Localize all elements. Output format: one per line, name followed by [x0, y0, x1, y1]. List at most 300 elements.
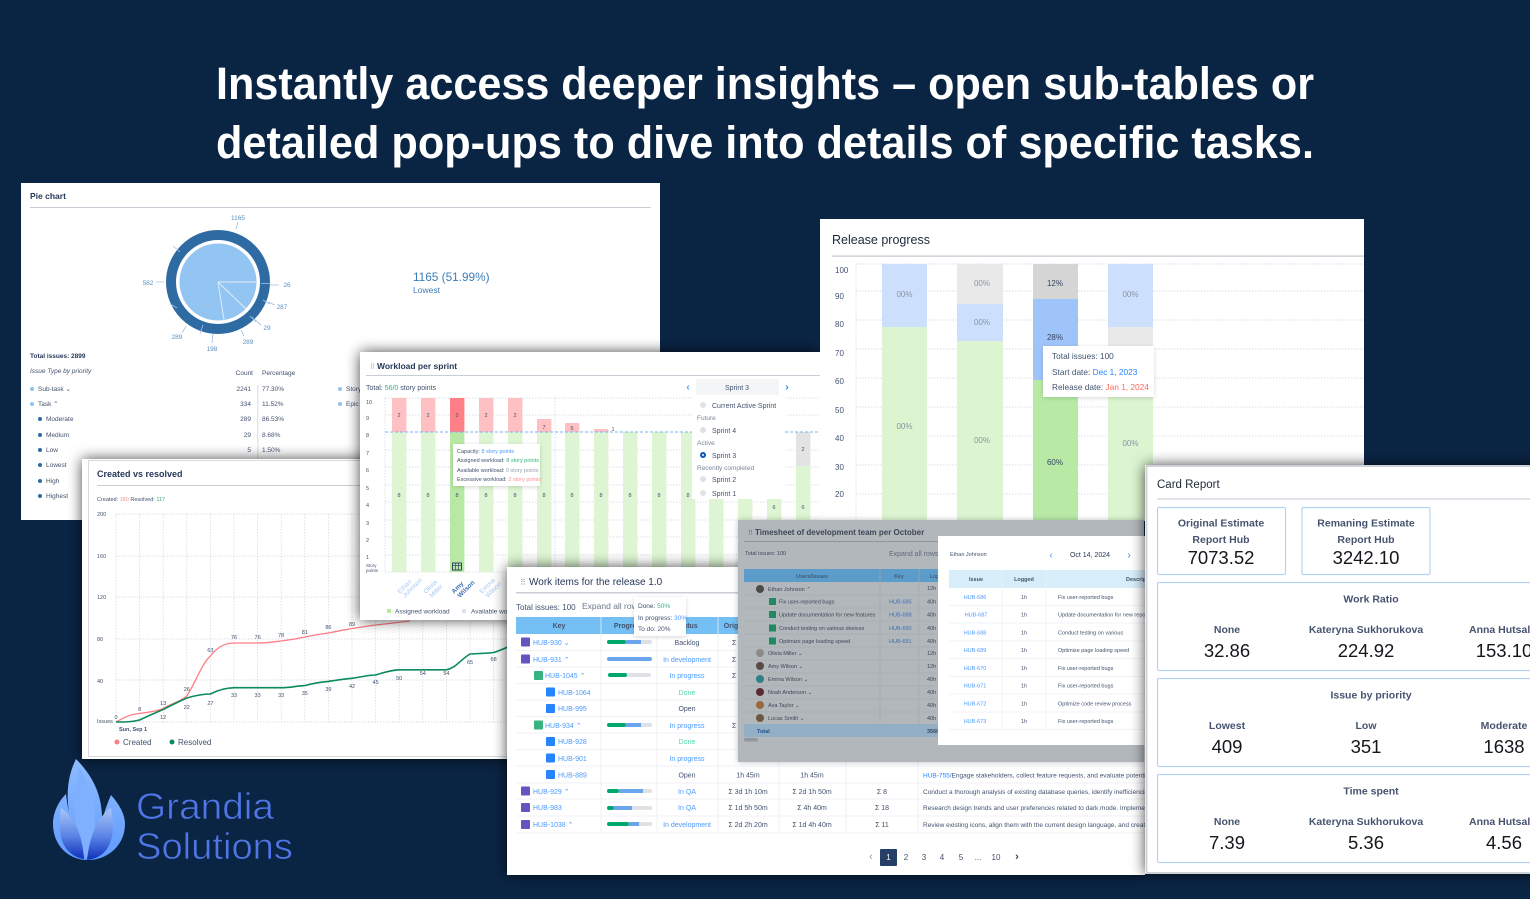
- data labels: 89: [349, 622, 355, 628]
- panel: release progress: Release progress: [832, 233, 930, 247]
- progress tooltip: To do: 20%: [638, 626, 671, 633]
- workload y axis: points: [366, 568, 379, 573]
- y axis labels: 160: [97, 554, 106, 560]
- workload y axis: 8: [366, 433, 369, 439]
- panel: created vs resolved: [82, 459, 522, 759]
- panel: work items: Work items for the release 1.0: [529, 577, 663, 588]
- pie chart table: 289: [240, 416, 251, 423]
- pie chart table: Task ⌃: [38, 400, 59, 408]
- panel: workload per sprint: Total: 56/0 story points: [366, 385, 437, 392]
- title: detailed pop-ups to dive into details of specific tasks.: [216, 117, 1314, 168]
- release y axis: 70: [835, 349, 844, 358]
- pie chart table: Highest: [46, 493, 68, 500]
- pagination: [869, 849, 1019, 866]
- workload y axis: 4: [366, 503, 369, 509]
- release bar 1: 00%: [896, 422, 913, 431]
- pagination: 2: [904, 853, 909, 862]
- release y axis: 40: [835, 434, 844, 443]
- workload grid: [385, 398, 820, 572]
- pie chart table: Story: [346, 386, 362, 393]
- release bar 4: 00%: [1122, 439, 1139, 448]
- card: work ratio: None: [1214, 624, 1240, 636]
- line chart legend: [114, 738, 211, 747]
- panel: card report: [1145, 465, 1530, 874]
- release tooltip: Release date: Jan 1, 2024: [1052, 382, 1149, 392]
- time columns: [728, 640, 889, 829]
- sprint selector: Current Active Sprint: [712, 403, 776, 410]
- timesheet users: 40h: [927, 677, 936, 683]
- data labels: 13: [160, 701, 166, 707]
- logo: Grandia Solutions: [53, 759, 293, 867]
- workload tooltip: Assigned workload: 8 story points: [457, 458, 539, 464]
- timesheet popup: Fix user-reported bugs: [1058, 666, 1114, 672]
- data labels: 63: [207, 648, 213, 654]
- timesheet popup: 1h: [1021, 666, 1027, 672]
- timesheet popup: Ethan Johnson: [950, 552, 987, 558]
- card: issue by priority: Issue by priority: [1330, 690, 1412, 702]
- work items table header: Key: [553, 623, 566, 630]
- description column: HUB-755/Engage stakeholders, collect feature requests, and evaluate potential: [923, 772, 1151, 780]
- sprint selector: Future: [697, 415, 716, 422]
- workload y axis: Story: [366, 563, 377, 568]
- pie chart value callout: 1165 (51.99%): [413, 270, 490, 284]
- workload bar values: 1: [611, 427, 615, 433]
- release y axis: 30: [835, 463, 844, 472]
- release bar 3: 28%: [1047, 333, 1063, 342]
- status column: Done: [679, 739, 695, 746]
- sprint selector: Active: [697, 440, 715, 447]
- donut chart: 289: [172, 334, 183, 341]
- pie chart table: Moderate: [46, 416, 74, 423]
- status column: Done: [679, 690, 695, 697]
- timesheet users: 12h: [927, 586, 936, 592]
- panel: timesheet: Total issues: 100: [745, 551, 786, 557]
- card: work ratio: Kateryna Sukhorukova: [1309, 624, 1423, 636]
- card: remaining estimate: Report Hub: [1337, 534, 1395, 546]
- timesheet popup: 1h: [1021, 630, 1027, 636]
- donut chart: 287: [277, 304, 288, 311]
- panel: work items: ⠿: [520, 578, 526, 587]
- timesheet popup: HUB-673: [964, 719, 986, 725]
- pie chart table: 8.68%: [262, 432, 281, 439]
- workload bar values: 8: [570, 493, 574, 499]
- row keys: HUB-901: [558, 756, 587, 763]
- pagination: 4: [940, 853, 945, 862]
- timesheet popup: Fix user-reported bugs: [1058, 719, 1114, 725]
- timesheet users: Lucas Smith ⌄: [768, 716, 804, 722]
- time columns: 1h 45m: [736, 772, 760, 780]
- data labels: 76: [231, 635, 237, 641]
- timesheet popup: Logged: [1014, 577, 1034, 583]
- timesheet popup: ‹: [1049, 550, 1053, 561]
- timesheet users: Noah Anderson ⌄: [768, 690, 812, 696]
- status column: In QA: [678, 789, 696, 796]
- card: remaining estimate: Remaning Estimate: [1317, 518, 1415, 530]
- card: issue by priority: 409: [1212, 736, 1242, 757]
- assignee labels: Wilson: [484, 580, 503, 599]
- workload bar values: 2: [484, 413, 488, 419]
- pie chart table: Medium: [46, 432, 69, 439]
- timesheet popup: HUB-672: [964, 702, 986, 708]
- assignee labels: Miller: [428, 583, 445, 599]
- data labels: 39: [325, 687, 331, 693]
- row keys: HUB-928: [558, 739, 587, 746]
- resolved line: [116, 646, 510, 722]
- status column: In progress: [669, 673, 705, 680]
- timesheet popup: Fix user-reported bugs: [1058, 684, 1114, 690]
- card: work ratio: [1158, 582, 1530, 670]
- panel: timesheet: Timesheet of development team per October: [755, 528, 924, 537]
- pagination: ...: [975, 853, 981, 862]
- release bar 2: 00%: [974, 318, 990, 327]
- time columns: Σ 2d 2h 20m: [728, 822, 768, 829]
- timesheet users: 40h: [927, 690, 936, 696]
- donut chart: 582: [143, 280, 154, 287]
- timesheet users: 40h: [927, 626, 936, 632]
- release tooltip: Start date: Dec 1, 2023: [1052, 367, 1138, 377]
- status column: In progress: [669, 723, 705, 730]
- title: [216, 58, 1314, 168]
- pagination: 1: [886, 853, 891, 862]
- timesheet popup: 1h: [1021, 702, 1027, 708]
- pie chart table: Low: [46, 447, 58, 454]
- release y axis: 90: [835, 292, 844, 301]
- assignee labels: Wilson: [456, 579, 476, 599]
- release y axis: 80: [835, 320, 844, 329]
- assignee labels: Johnson: [401, 577, 424, 599]
- workload bar values: 8: [599, 493, 603, 499]
- logo: Grandia Solutions: Grandia: [136, 786, 274, 827]
- data labels: 65: [467, 660, 473, 666]
- data labels: 22: [184, 705, 190, 711]
- row keys: HUB-934 ⌃: [545, 722, 582, 730]
- donut chart: 26: [283, 282, 291, 289]
- timesheet popup: 1h: [1021, 684, 1027, 690]
- timesheet popup: Oct 14, 2024: [1070, 552, 1110, 559]
- data labels: 81: [302, 630, 308, 636]
- release tooltip: [1043, 346, 1154, 397]
- line chart legend: Created: [123, 738, 151, 747]
- data labels: 68: [491, 657, 497, 663]
- card: issue by priority: 351: [1351, 736, 1381, 757]
- work items table header: Orig: [724, 623, 738, 630]
- panel: work items: Total issues: 100: [516, 603, 576, 612]
- timesheet popup: 1h: [1021, 612, 1027, 618]
- data labels: 35: [302, 691, 308, 697]
- workload bar values: 8: [513, 493, 517, 499]
- workload y axis: 1: [366, 555, 369, 561]
- timesheet users: [756, 585, 936, 722]
- data labels: 42: [349, 684, 355, 690]
- timesheet popup: Issue: [969, 577, 983, 583]
- status column: In QA: [678, 805, 696, 812]
- row keys: HUB-1038 ⌃: [533, 821, 574, 829]
- workload y axis: 2: [366, 538, 369, 544]
- timesheet table: Users/Issues: [796, 574, 828, 580]
- release tooltip: Total issues: 100: [1052, 351, 1114, 361]
- release bar 3: 60%: [1047, 458, 1063, 467]
- time columns: Σ 1d 4h 40m: [792, 822, 832, 829]
- pagination: ‹: [869, 851, 873, 863]
- pie chart table: Epic: [346, 401, 359, 408]
- time columns: Σ 4h 40m: [797, 805, 827, 812]
- description column: Review existing icons, align them with the current design language, and create: [923, 822, 1149, 829]
- timesheet popup: Optimize page loading speed: [1058, 648, 1129, 654]
- release y axis: 50: [835, 406, 844, 415]
- card: remaining estimate: 3242.10: [1333, 547, 1399, 568]
- data labels: 50: [396, 676, 402, 682]
- time columns: Σ 1d 5h 50m: [728, 805, 768, 812]
- card: original estimate: Original Estimate: [1178, 518, 1264, 530]
- donut chart: 289: [243, 339, 254, 346]
- panel: pie chart: [21, 183, 660, 520]
- workload tooltip: Available workload: 0 story points: [457, 468, 539, 474]
- assignee labels: Emma: [478, 577, 497, 595]
- card: work ratio: 32.86: [1204, 640, 1250, 661]
- sprint selector: Sprint 1: [712, 491, 736, 498]
- release y axis: [835, 266, 849, 499]
- status column: [663, 640, 711, 829]
- row keys: HUB-889: [558, 772, 587, 780]
- release y axis: 100: [835, 266, 849, 275]
- workload bar values: 5: [570, 426, 574, 432]
- capacity line: [385, 431, 820, 433]
- donut chart: 1165: [231, 215, 245, 222]
- release y axis: 60: [835, 377, 844, 386]
- panel: timesheet: Expand all rows: [889, 551, 939, 558]
- line chart legend: Resolved: [178, 738, 211, 747]
- release bar 4: [1108, 264, 1153, 521]
- timesheet users: 12h: [927, 664, 936, 670]
- data labels: 54: [420, 671, 426, 677]
- time columns: Σ 1: [732, 657, 742, 664]
- card: original estimate: 7073.52: [1188, 547, 1254, 568]
- pie chart table: 86.53%: [262, 416, 284, 423]
- sprint selector: [686, 379, 789, 499]
- panel: workload per sprint: [360, 352, 820, 620]
- timesheet users: Amy Wilson ⌄: [768, 664, 803, 670]
- workload bar values: 8: [657, 493, 661, 499]
- pie chart table: 334: [240, 401, 251, 408]
- release bar 2: 00%: [974, 436, 990, 445]
- time columns: Σ 8: [877, 789, 887, 796]
- row keys: HUB-995: [558, 706, 587, 713]
- release bar 1: [882, 264, 927, 521]
- release bar 3: [1033, 264, 1078, 521]
- sprint selector: ›: [785, 382, 789, 393]
- card: issue by priority: 1638: [1483, 736, 1525, 757]
- status column: Open: [678, 772, 696, 780]
- row keys: HUB-983: [533, 805, 562, 812]
- time columns: Σ: [732, 673, 737, 680]
- pie chart table: 2241: [237, 386, 251, 393]
- time columns: Σ 3d 1h 10m: [728, 789, 768, 796]
- release grid: [856, 264, 1364, 521]
- timesheet popup: Description: [1126, 577, 1157, 583]
- status column: In development: [663, 657, 711, 664]
- progress tooltip: [634, 597, 687, 636]
- timesheet users: Ava Taylor ⌄: [768, 703, 800, 709]
- sprint selector: Sprint 3: [725, 385, 749, 392]
- work items row lines: [516, 617, 1146, 833]
- row keys: HUB-931 ⌃: [533, 656, 570, 664]
- y axis labels: [97, 512, 147, 733]
- time columns: Σ: [732, 723, 737, 730]
- pagination: 5: [959, 853, 964, 862]
- card: time spent: Kateryna Sukhorukova: [1309, 816, 1423, 828]
- timesheet users: Olivia Miller ⌄: [768, 651, 803, 657]
- workload legend: Available workload: [471, 608, 525, 616]
- data labels: 45: [373, 680, 379, 686]
- workload bar values: 6: [801, 505, 805, 511]
- workload bar values: 2: [801, 447, 805, 453]
- timesheet popup: HUB-671: [964, 684, 986, 690]
- workload legend: [387, 608, 525, 616]
- data labels: 12: [160, 715, 166, 721]
- panel: workload per sprint: ⠿: [370, 363, 375, 371]
- timesheet popup: HUB-689: [964, 648, 986, 654]
- timesheet users: 40h: [927, 600, 936, 606]
- card: issue by priority: [1158, 678, 1530, 766]
- logo: Grandia Solutions: Solutions: [136, 826, 293, 867]
- pagination: 10: [992, 853, 1001, 862]
- progress tooltip: Done: 50%: [638, 603, 670, 610]
- assignee labels: Olivia: [422, 579, 439, 595]
- card: original estimate: Report Hub: [1192, 534, 1250, 546]
- progress tooltip: In progress: 30%: [638, 615, 687, 622]
- timesheet popup: HUB-687: [965, 612, 987, 618]
- workload bar values: 2: [397, 413, 401, 419]
- sprint selector: Sprint 4: [712, 428, 736, 435]
- icon: table: [452, 563, 462, 570]
- pagination: 3: [922, 853, 927, 862]
- panel: pie chart: Pie chart: [30, 191, 66, 201]
- pie chart table: Lowest: [46, 462, 67, 469]
- workload y axis: 7: [366, 451, 369, 457]
- workload bar values: 8: [426, 493, 430, 499]
- workload bar values: 2: [455, 413, 459, 419]
- timesheet users: Optimize page loading speed: [779, 639, 850, 645]
- timesheet popup: Fix user-reported bugs: [1058, 595, 1114, 601]
- sprint selector: Sprint 3: [712, 453, 736, 460]
- card: time spent: 5.36: [1348, 832, 1384, 853]
- workload y axis: 5: [366, 486, 369, 492]
- row keys: HUB-1064: [558, 690, 591, 697]
- pie chart table: Count: [236, 370, 253, 377]
- y axis labels: 200: [97, 512, 106, 518]
- progress bars: [607, 640, 652, 826]
- panel: release progress: [820, 219, 1364, 521]
- workload bar values: 8: [455, 493, 459, 499]
- card: original estimate: [1158, 508, 1286, 574]
- status column: Open: [678, 706, 696, 713]
- pie chart table: High: [46, 478, 60, 485]
- panel: work items: Expand all rows: [582, 601, 642, 611]
- card: work ratio: Work Ratio: [1343, 594, 1399, 606]
- work items table header: Status: [676, 623, 698, 630]
- data labels: 27: [207, 701, 213, 707]
- timesheet table: 356h: [927, 729, 940, 735]
- timesheet popup: HUB-688: [964, 630, 986, 636]
- data labels: 33: [255, 693, 261, 699]
- workload y axis: 10: [366, 400, 372, 406]
- work items table header: [516, 617, 738, 634]
- timesheet popup: 1h: [1021, 719, 1027, 725]
- panel: card report: Card Report: [1157, 479, 1220, 491]
- assignee labels: Amy: [450, 580, 466, 595]
- panel: created vs resolved: Created: 180 Resolved: 117: [97, 497, 165, 503]
- panel: work items: [507, 567, 1152, 875]
- workload y axis: 6: [366, 468, 369, 474]
- timesheet table: Logged: [930, 574, 948, 580]
- timesheet popup: Conduct testing on various: [1058, 630, 1123, 636]
- pie chart value callout: Lowest: [413, 285, 441, 295]
- y axis labels: 80: [97, 637, 103, 643]
- data labels: 78: [278, 633, 284, 639]
- timesheet popup: Update documentation for new report: [1058, 612, 1149, 618]
- workload bar values: 8: [397, 493, 401, 499]
- data labels: 54: [443, 671, 449, 677]
- data labels: 76: [255, 635, 261, 641]
- release bar 2: [957, 264, 1003, 521]
- timesheet users: 40h: [927, 612, 936, 618]
- row keys: HUB-929 ⌃: [533, 788, 570, 796]
- row keys: HUB-1045 ⌃: [545, 672, 586, 680]
- donut chart: 29: [263, 325, 271, 332]
- pie chart table: Sub-task ⌄: [38, 386, 71, 393]
- y axis labels: 40: [97, 679, 103, 685]
- timesheet users: Emma Wilson ⌄: [768, 677, 808, 683]
- card: time spent: [1158, 774, 1530, 862]
- data labels: 26: [184, 687, 190, 693]
- workload y axis: 9: [366, 416, 369, 422]
- row keys: HUB-930 ⌄: [533, 640, 570, 647]
- release y axis: 20: [835, 490, 844, 499]
- timesheet users: Fix user-reported bugs: [779, 600, 835, 606]
- timesheet users: Conduct testing on various devices: [779, 626, 865, 632]
- card: time spent: None: [1214, 816, 1240, 828]
- data labels: 33: [278, 693, 284, 699]
- card: issue by priority: Low: [1356, 720, 1377, 732]
- timesheet users: Update documentation for new features: [779, 612, 876, 618]
- workload bar values: 7: [542, 425, 546, 431]
- release bar 2: 00%: [974, 279, 990, 288]
- timesheet popup: ›: [1127, 550, 1131, 561]
- workload bar values: 8: [628, 493, 632, 499]
- timesheet users: HUB-690: [889, 626, 912, 632]
- workload tooltip: Capacity: 8 story points: [457, 449, 514, 455]
- sprint selector: ‹: [686, 382, 690, 393]
- timesheet popup: 1h: [1021, 648, 1027, 654]
- line chart grid: [116, 514, 510, 722]
- card: issue by priority: Moderate: [1481, 720, 1527, 732]
- pie chart table: [30, 353, 362, 500]
- pie chart table: Percentage: [262, 370, 296, 377]
- donut chart: 198: [207, 346, 218, 353]
- data labels: [114, 622, 497, 721]
- card: time spent: Time spent: [1343, 786, 1399, 798]
- timesheet users: HUB-688: [889, 612, 912, 618]
- pie chart value callout: [413, 270, 490, 295]
- status column: Backlog: [675, 640, 700, 647]
- workload bar values: 8: [484, 493, 488, 499]
- donut chart: [143, 215, 291, 353]
- time columns: 1h 45m: [800, 772, 824, 780]
- panel: created vs resolved: Created vs resolved: [97, 469, 183, 479]
- card: remaining estimate: [1302, 508, 1430, 574]
- description column: Research design trends and user preferences related to dark mode. Implement: [923, 805, 1150, 812]
- timesheet users: 40h: [927, 703, 936, 709]
